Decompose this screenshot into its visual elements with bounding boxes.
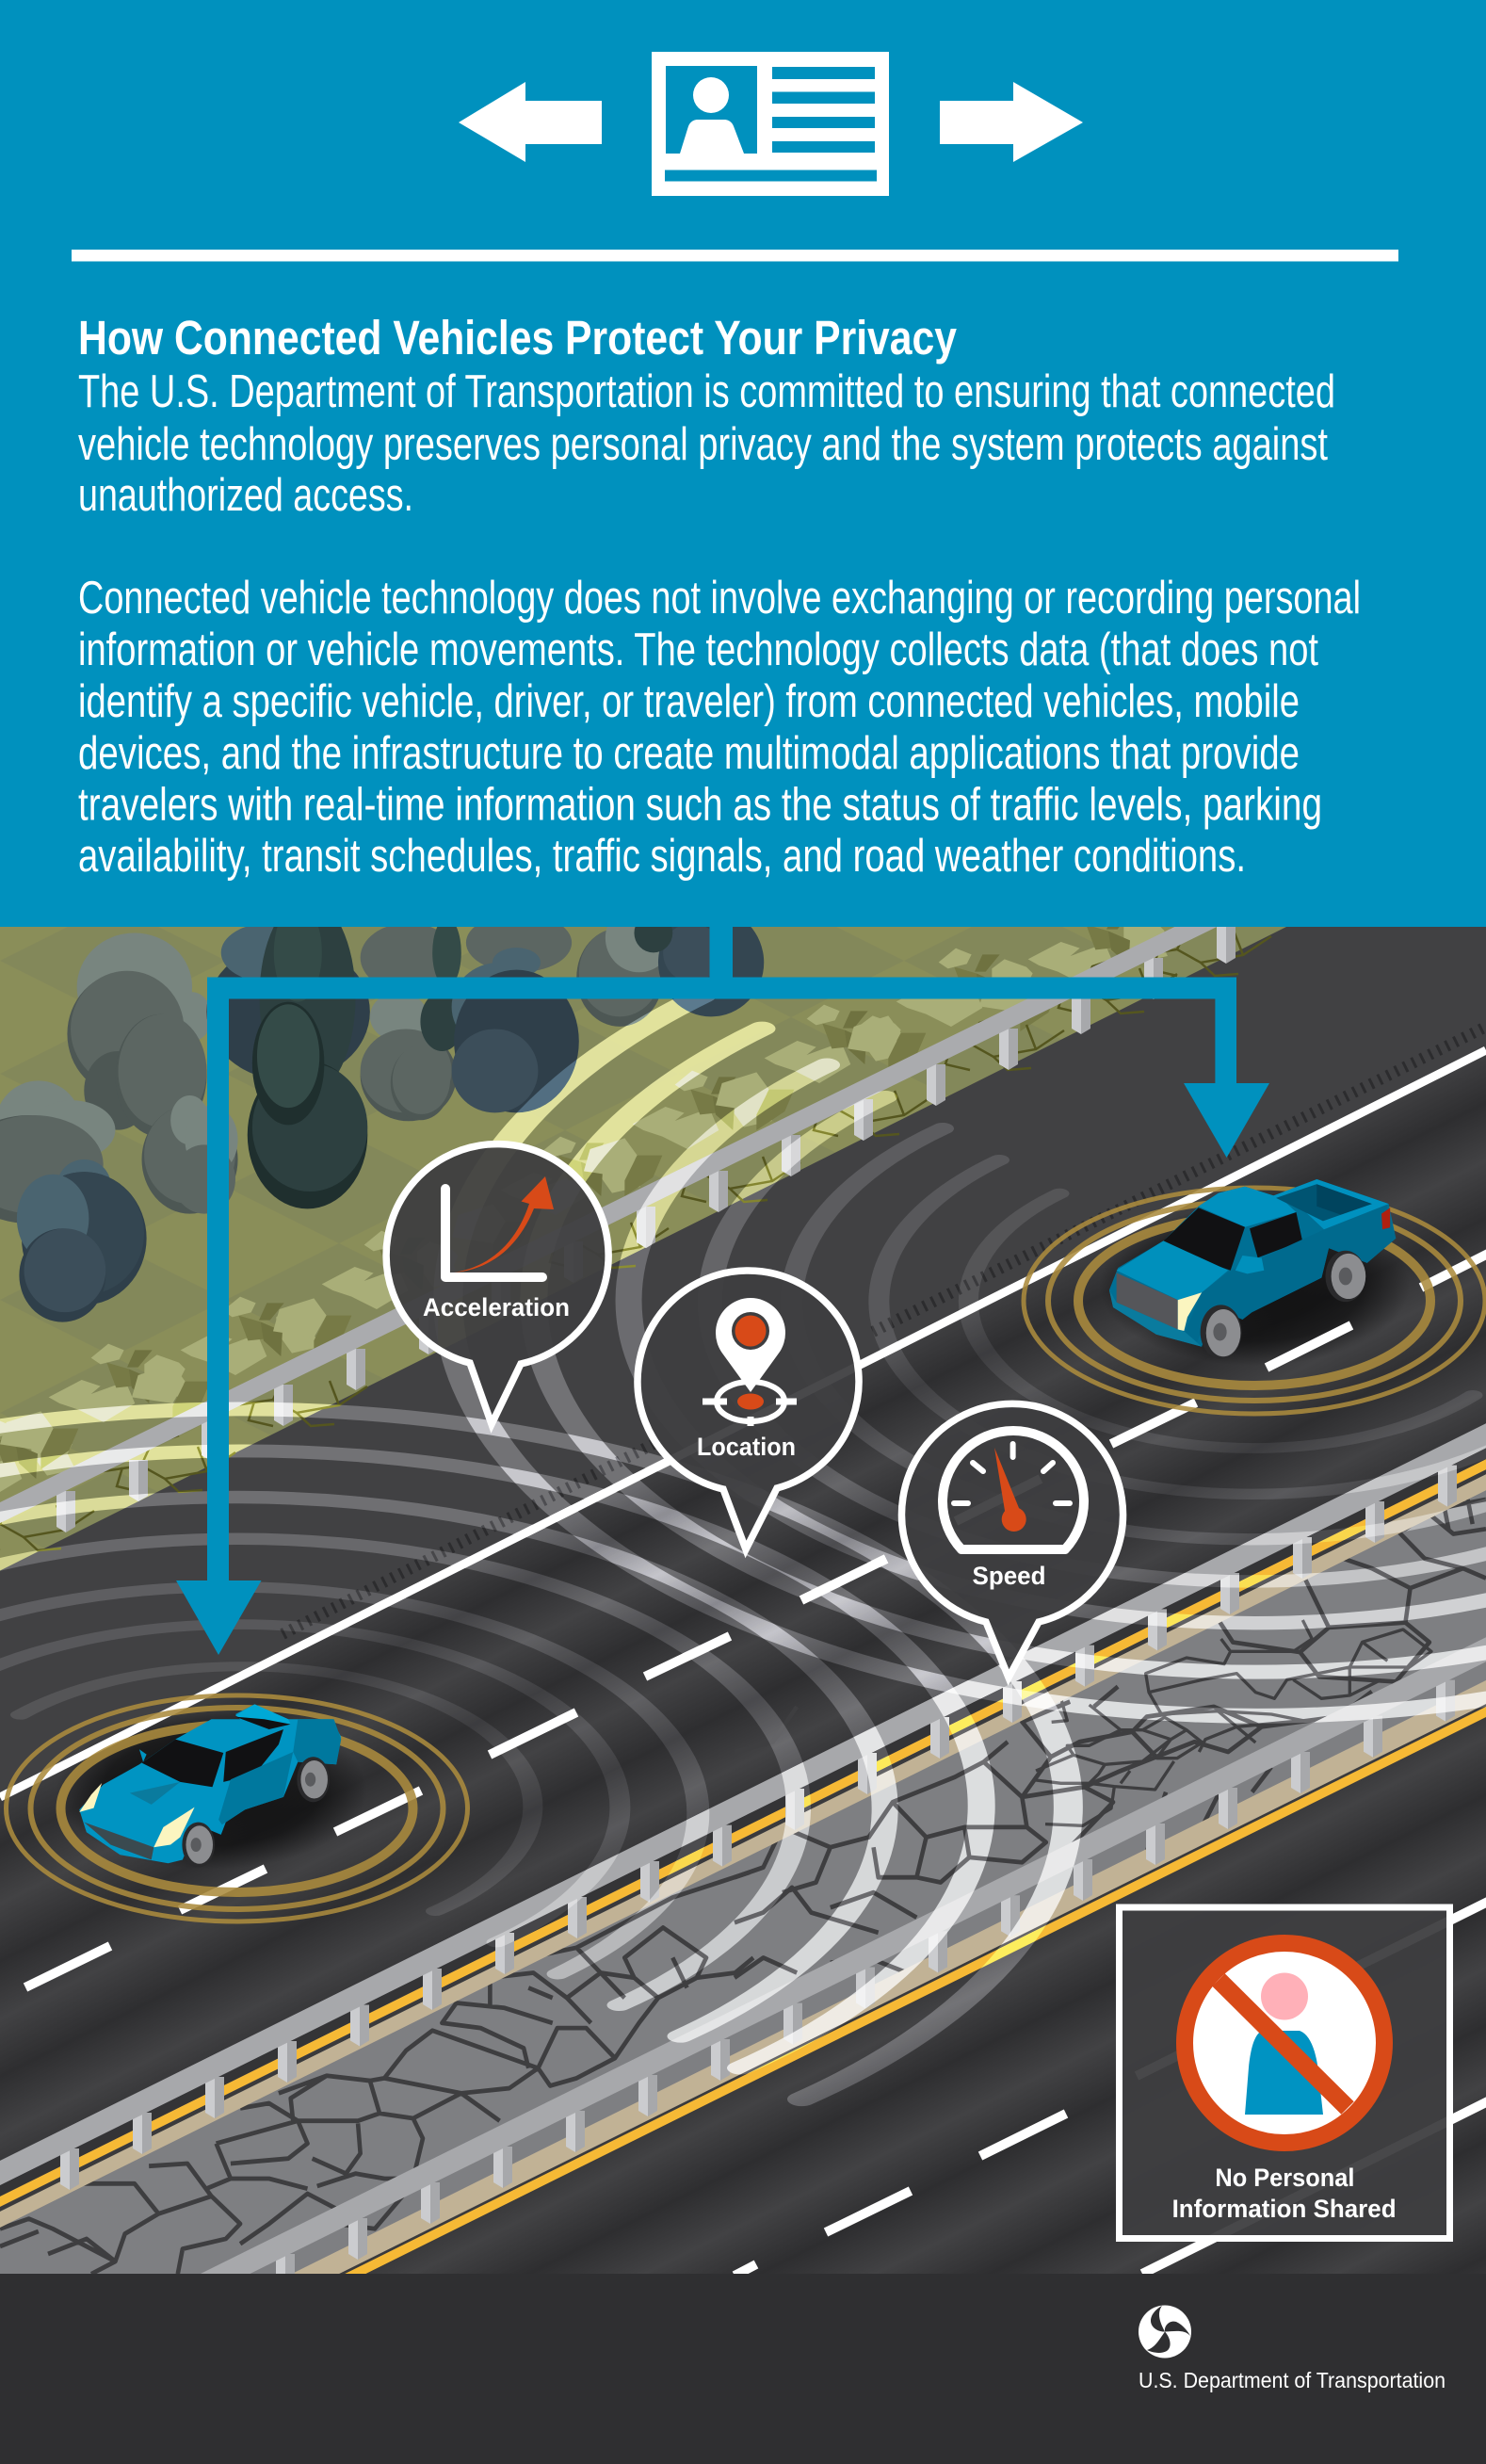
text block: commitment [78, 366, 1335, 521]
connector: blue arrows to both vehicles [176, 927, 1269, 1655]
vehicle ground shadows [57, 1206, 1410, 1870]
panel: no personal information shared [1119, 1907, 1450, 2238]
text block: commitment: unauthorized access. [78, 470, 413, 521]
pickup truck [1109, 1179, 1396, 1359]
icon: right arrow [940, 82, 1083, 162]
callout: location [638, 1271, 859, 1549]
upper guardrail [0, 774, 1486, 1532]
signal arcs from the pickup truck [448, 996, 1486, 1716]
panel: no personal information shared: No Personal [1215, 2164, 1354, 2192]
icon: department of transportation logo [1139, 2306, 1191, 2359]
icon: ID card [652, 52, 889, 196]
footer band [0, 2274, 1486, 2464]
text block: technology description [78, 573, 1361, 882]
callout: speed: Speed [972, 1562, 1045, 1590]
panel: no personal information shared: Information Shared [1172, 2195, 1397, 2223]
callout: acceleration [386, 1144, 608, 1424]
median with cracked pavement [0, 1423, 1486, 2456]
callout: location: Location [697, 1433, 796, 1461]
signal arcs from the sports car [0, 1409, 1068, 2099]
sensing rings: sports car [6, 1695, 467, 1921]
callout: speed [901, 1403, 1123, 1678]
icon: left arrow [459, 82, 602, 162]
cracked earth patches [0, 906, 1271, 1550]
road edge line and lane markings [0, 1027, 1486, 2276]
sports car [79, 1704, 341, 1868]
grassy ground [0, 927, 1286, 1571]
callout: acceleration: Acceleration [423, 1293, 570, 1321]
road surface background [0, 827, 1486, 2283]
panel: blue header [0, 0, 1486, 927]
organization name: U.S. Department of Transportation [1139, 2368, 1446, 2392]
trees [0, 899, 764, 1322]
heading: How Connected Vehicles Protect Your Privacy [78, 311, 958, 365]
sensing rings: truck [1024, 1188, 1485, 1414]
